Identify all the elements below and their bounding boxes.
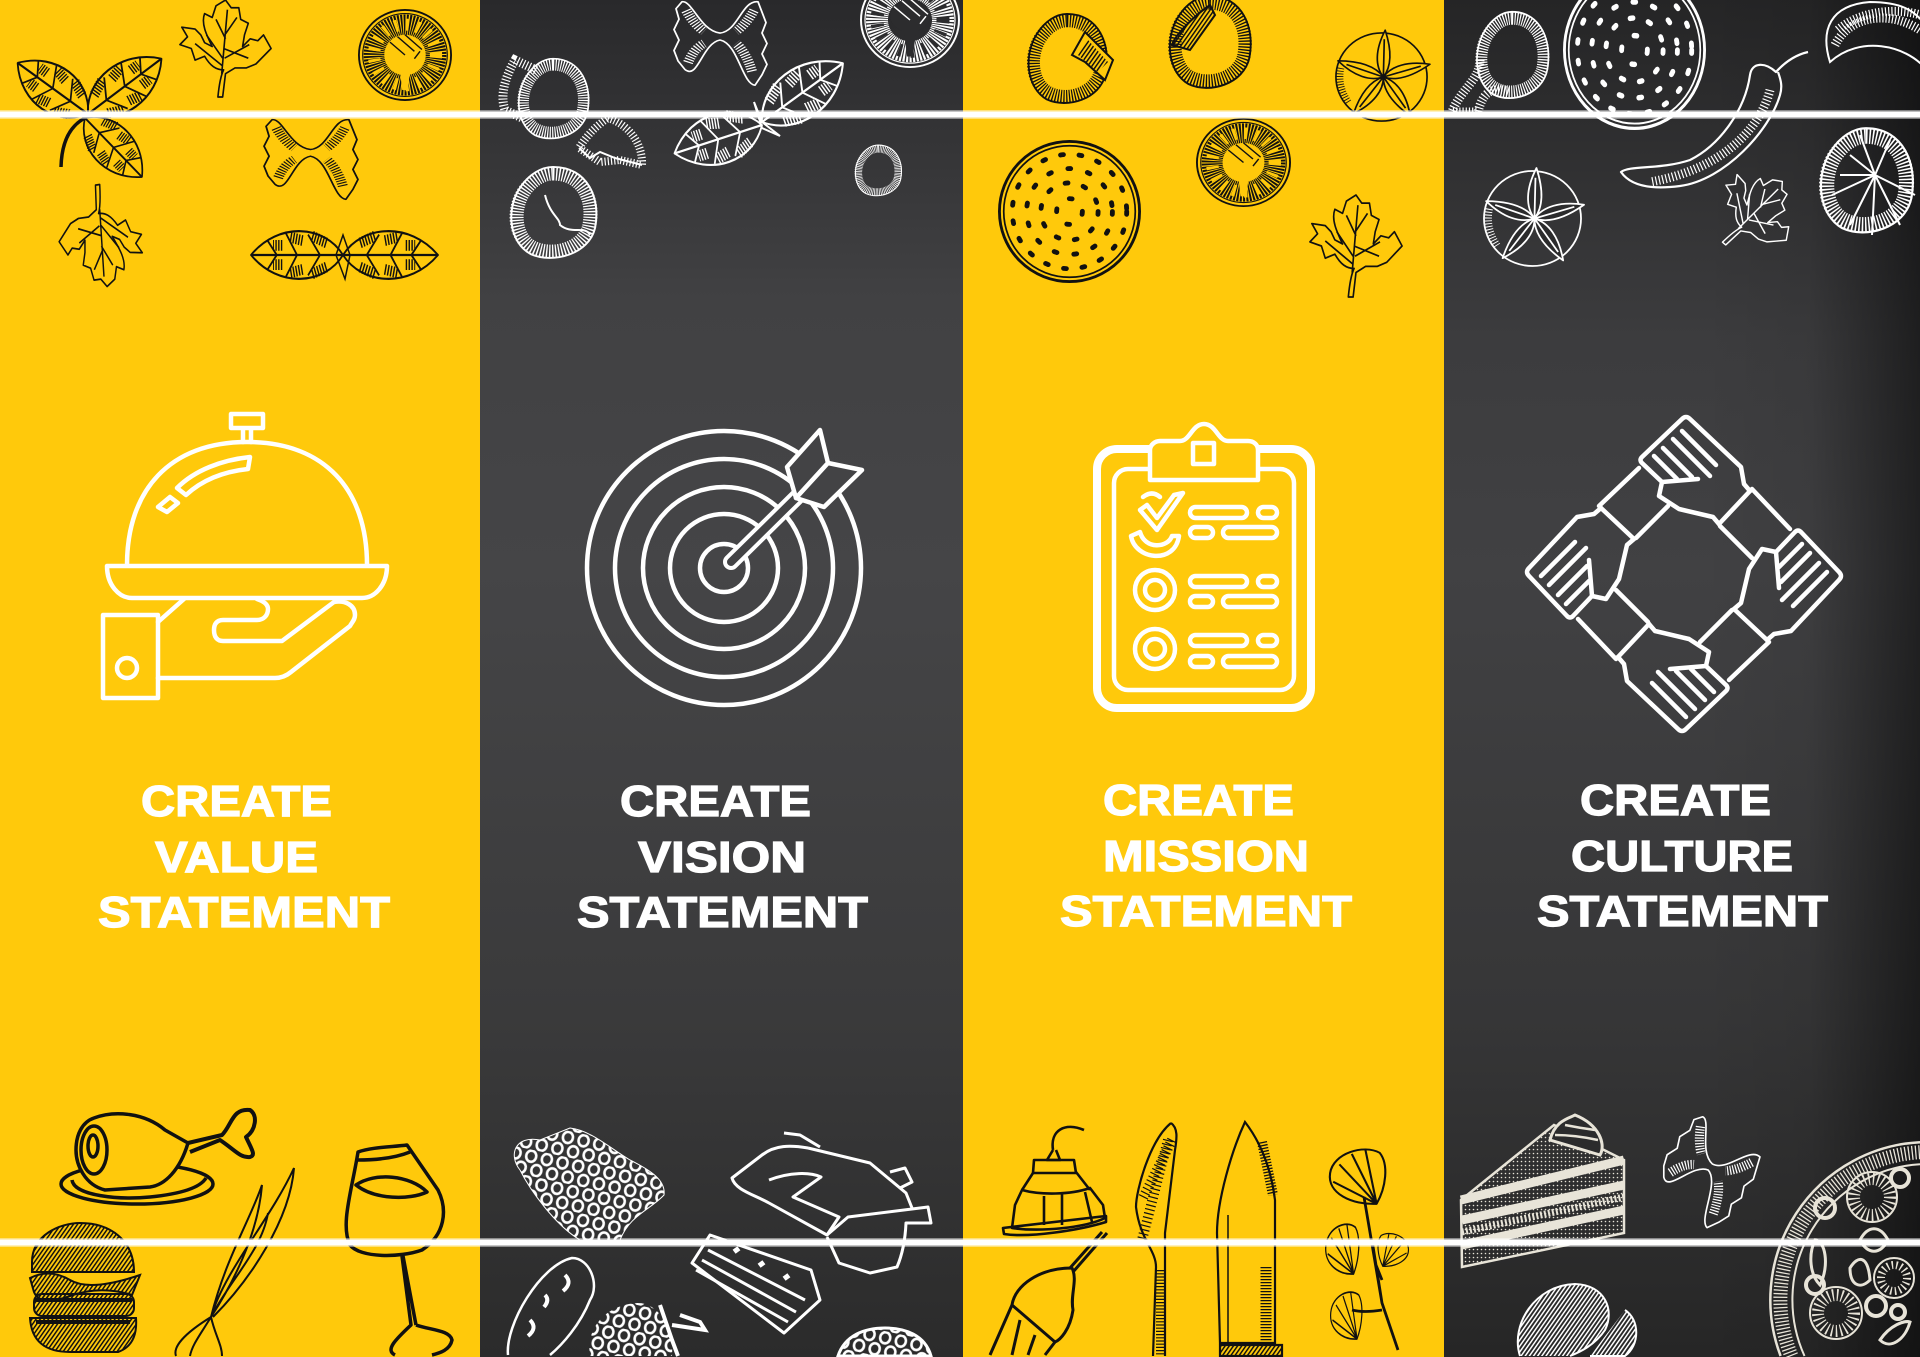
icon: chili pepper xyxy=(1621,52,1808,187)
heading: create value statement xyxy=(98,785,390,928)
heading: create mission statement: STATEMENT xyxy=(1060,887,1352,936)
icon: farfalle pasta xyxy=(264,120,358,199)
icon: scallion xyxy=(175,1168,294,1356)
icon: mushroom cap xyxy=(1170,0,1251,88)
icon: raspberry xyxy=(514,1128,664,1240)
heading: create vision statement: STATEMENT xyxy=(577,888,868,937)
icon: mushroom half xyxy=(1029,14,1113,103)
icon: table knife xyxy=(1136,1123,1176,1356)
icon: farfalle pasta xyxy=(674,2,767,85)
icon: large mushroom shell xyxy=(511,167,596,258)
icon: parsley leaf xyxy=(1696,155,1814,273)
icon: basil sprig xyxy=(16,56,162,178)
icon: roast chicken xyxy=(732,1133,931,1273)
icon: whole tomato xyxy=(1484,168,1586,266)
icon: chef knife xyxy=(1217,1122,1282,1356)
icon: mushroom crescent xyxy=(1826,2,1920,68)
icon: parsley xyxy=(1310,195,1402,297)
heading: create mission statement: MISSION xyxy=(1103,832,1309,881)
heading: create culture statement: CULTURE xyxy=(1571,832,1793,881)
icon: mushroom xyxy=(1452,12,1548,112)
icon: whole tomato xyxy=(1335,30,1431,121)
icon: bread loaf xyxy=(508,1258,594,1355)
icon: flower stem xyxy=(1326,1149,1408,1350)
icon: roast ham on plate xyxy=(61,1110,255,1204)
icon: parsley sprig xyxy=(58,184,144,288)
heading: create vision statement: VISION xyxy=(638,833,806,882)
icon: four joined hands xyxy=(1527,417,1841,731)
icon: tomato slice xyxy=(861,0,959,67)
icon: wine glass xyxy=(346,1145,452,1355)
icon: parsley xyxy=(180,0,271,97)
icon: mushroom piece xyxy=(579,118,642,165)
icon: burger xyxy=(30,1223,140,1352)
icon: onion ring xyxy=(855,145,901,196)
heading: create culture statement xyxy=(1537,776,1828,936)
heading: create mission statement: CREATE xyxy=(1103,776,1294,825)
icon: strawberry xyxy=(589,1303,705,1356)
icon: cloche on hand xyxy=(103,414,387,698)
heading: create value statement: CREATE xyxy=(141,777,332,826)
icon: layered cake slice xyxy=(1461,1115,1624,1267)
icon: burger xyxy=(1518,1284,1636,1356)
icon: tomato slice xyxy=(359,10,451,100)
icon: sesame bun xyxy=(1564,0,1705,128)
heading: create culture statement: CREATE xyxy=(1580,776,1771,825)
panel: value statement xyxy=(0,0,480,1357)
heading: create value statement: VALUE xyxy=(155,833,318,882)
panel: vision statement xyxy=(480,0,963,1357)
top white band xyxy=(0,110,1920,119)
icon: target with dart xyxy=(587,430,862,705)
heading: create culture statement: STATEMENT xyxy=(1537,887,1828,936)
icon: basil pair xyxy=(674,60,844,166)
icon: wide basil xyxy=(251,231,438,279)
icon: layered jelly xyxy=(1003,1127,1106,1235)
panel: mission statement xyxy=(963,0,1444,1357)
icon: mushroom ring xyxy=(503,59,589,138)
icon: pizza xyxy=(1770,1142,1920,1356)
heading: create vision statement xyxy=(578,785,868,928)
bottom white band xyxy=(0,1238,1920,1247)
icon: tart xyxy=(838,1328,931,1356)
icon: tomato slice xyxy=(1197,119,1290,206)
icon: clipboard checklist xyxy=(1097,424,1311,708)
heading: create mission statement xyxy=(1060,776,1352,936)
icon: pepper slice xyxy=(1821,128,1915,235)
icon: sesame bun xyxy=(999,141,1140,282)
icon: farfalle pasta xyxy=(1646,1112,1767,1234)
heading: create vision statement: CREATE xyxy=(620,777,811,826)
heading: create value statement: STATEMENT xyxy=(98,888,390,937)
icon: ice cream xyxy=(990,1232,1107,1355)
panel: culture statement xyxy=(1444,0,1920,1357)
icon: cake slice xyxy=(692,1235,820,1333)
